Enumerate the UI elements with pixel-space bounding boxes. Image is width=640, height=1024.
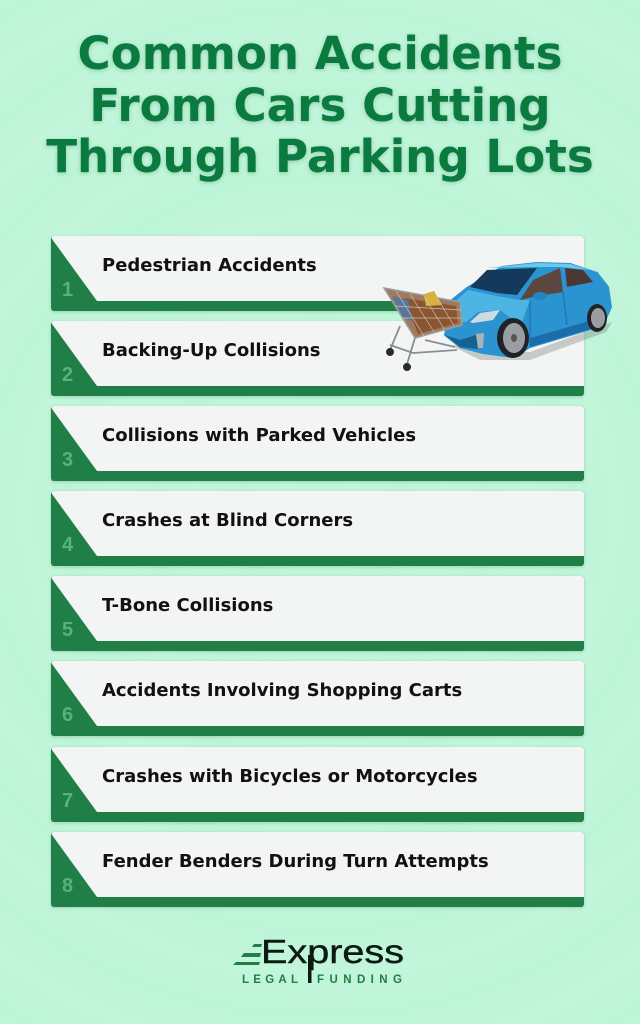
cart blue goods — [392, 296, 413, 322]
grocery items — [424, 291, 442, 306]
list item 7: 7 — [62, 790, 73, 812]
list item 3 — [51, 406, 584, 481]
logo p stem — [308, 955, 312, 983]
car lower body shade — [530, 318, 603, 347]
mirror — [533, 292, 547, 300]
title: Common Accidents — [77, 27, 562, 80]
car front bumper — [445, 335, 478, 349]
list item 3: Collisions with Parked Vehicles — [102, 425, 416, 446]
car shadow — [450, 322, 612, 360]
cart frame — [390, 326, 457, 364]
list item 6: Accidents Involving Shopping Carts — [102, 680, 462, 701]
list item 4: Crashes at Blind Corners — [102, 510, 353, 531]
list item 3: 3 — [62, 449, 73, 471]
list item 8 — [51, 832, 584, 907]
list item 8: Fender Benders During Turn Attempts — [102, 851, 489, 872]
front wheel — [497, 318, 529, 358]
list item 2: Backing-Up Collisions — [102, 340, 320, 361]
list item 6: 6 — [62, 704, 73, 726]
bumper vent — [476, 333, 484, 348]
side window front — [520, 268, 563, 300]
list item 4 — [51, 491, 584, 566]
list item 1 — [51, 236, 584, 311]
logo subline left: LEGAL — [242, 974, 298, 986]
title — [44, 27, 594, 185]
door seam — [530, 292, 567, 345]
list item 7: Crashes with Bicycles or Motorcycles — [102, 766, 478, 787]
list item 1: Pedestrian Accidents — [102, 255, 317, 276]
car hood highlight — [450, 290, 530, 322]
list item 1: 1 — [62, 279, 73, 301]
list item 5: T-Bone Collisions — [102, 595, 273, 616]
list item 4: 4 — [62, 534, 73, 556]
list item 6 — [51, 661, 584, 736]
cart mesh — [395, 291, 461, 336]
list item 8: 8 — [62, 875, 73, 897]
headlight — [470, 310, 500, 323]
car roof highlight — [487, 263, 590, 270]
logo subline right: FUNDING — [317, 974, 402, 986]
side window rear — [565, 268, 593, 287]
list item 5: 5 — [62, 619, 73, 641]
car body — [445, 263, 611, 357]
cart basket — [384, 288, 462, 338]
list item 7 — [51, 747, 584, 822]
logo: Express Legal Funding — [233, 935, 404, 986]
cart wheels — [386, 348, 411, 371]
rear wheel — [587, 304, 607, 332]
list item 5 — [51, 576, 584, 651]
illustration: car hitting shopping cart — [382, 262, 612, 371]
logo speed stripes — [233, 944, 262, 965]
title: Through Parking Lots — [46, 130, 594, 183]
title: From Cars Cutting — [89, 78, 551, 132]
list item 2 — [51, 321, 584, 396]
cart groceries — [404, 298, 458, 334]
list item 2: 2 — [62, 364, 73, 386]
windshield — [470, 268, 537, 295]
